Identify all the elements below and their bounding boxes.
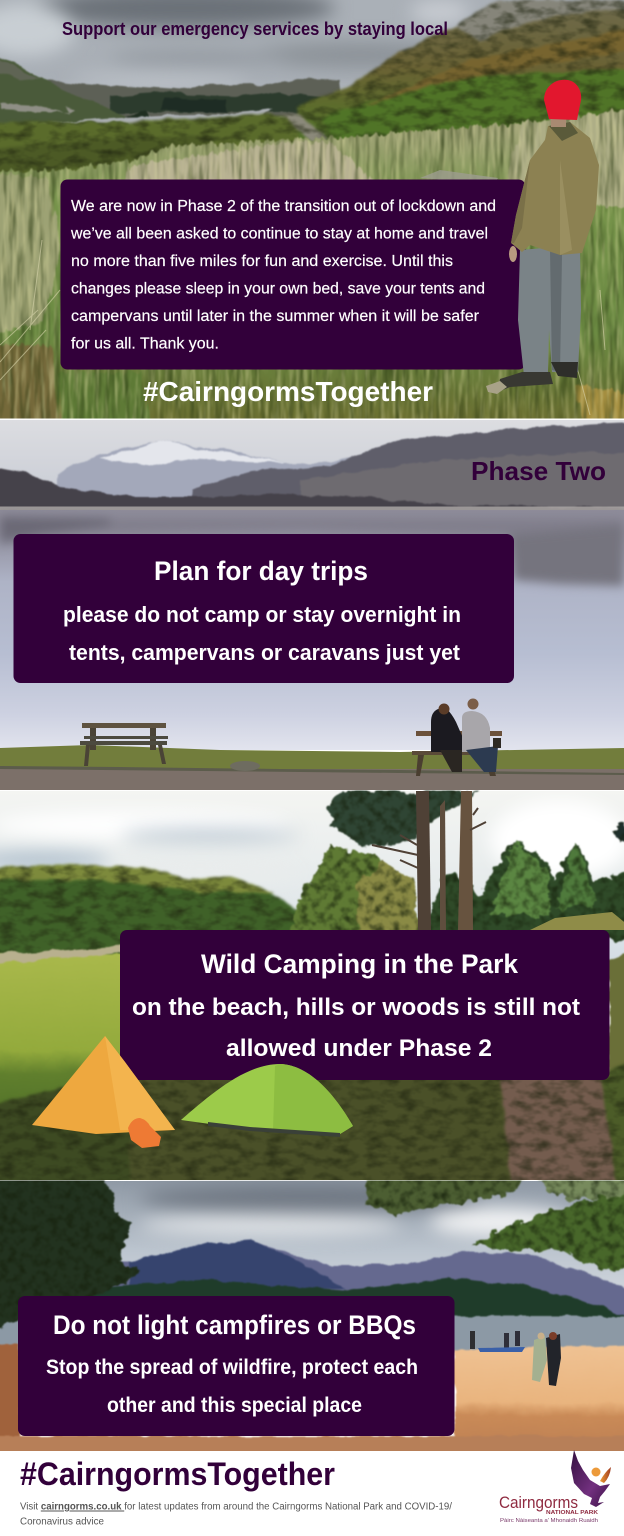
panel: campfires and BBQs	[0, 1175, 624, 1460]
text box: phase 2 message: We are now in Phase 2 of the transition out of lockdown and	[71, 198, 496, 215]
text box: wild camping message: Wild Camping in the Park	[201, 949, 519, 979]
panel: plan for day trips	[0, 420, 624, 790]
text box: campfires message: Stop the spread of wildfire, protect each	[46, 1356, 418, 1379]
logo: cairngorms national park	[499, 1450, 611, 1524]
text box: phase 2 message: for us all. Thank you.	[71, 336, 219, 352]
text: visit cairngorms.co.uk	[20, 1502, 452, 1528]
hashtag: cairngorms together white: #CairngormsTogether	[143, 376, 433, 407]
text box: plan for day trips	[14, 534, 514, 683]
text box: plan for day trips: tents, campervans or caravans just yet	[69, 640, 460, 665]
text box: wild camping message: on the beach, hills or woods is still not	[132, 994, 580, 1021]
icon: sun and flame	[592, 1467, 611, 1483]
text: visit cairngorms.co.uk: Coronavirus advice	[20, 1516, 104, 1528]
text box: phase 2 message: we’ve all been asked to continue to stay at home and travel	[70, 226, 488, 242]
wordmark: gaelic name: Pàirc Nàiseanta a’ Mhonaidh Ruaidh	[500, 1518, 598, 1524]
panel: wild camping	[0, 791, 624, 1190]
text box: campfires message: Do not light campfires or BBQs	[53, 1310, 416, 1340]
text box: campfires message: other and this special place	[107, 1394, 362, 1417]
text: visit cairngorms.co.uk: Visit cairngorms.co.uk for latest updates from around the Cairngorms National Park and COVID-19/	[20, 1502, 452, 1512]
text box: wild camping message	[120, 930, 610, 1080]
figure: couple at picnic bench	[412, 698, 502, 776]
text box: plan for day trips: please do not camp or stay overnight in	[63, 602, 461, 627]
background: pine forest and hills photo	[0, 791, 624, 1190]
background: loch with picnic benches	[0, 420, 624, 790]
icon: orange tent	[32, 1036, 175, 1148]
wordmark: cairngorms: Cairngorms	[499, 1493, 578, 1512]
wordmark: national park: NATIONAL PARK	[546, 1510, 598, 1516]
text box: campfires message	[18, 1296, 454, 1436]
background: highland glen photo	[0, 0, 624, 430]
heading: support our emergency services: Support our emergency services by staying local	[62, 19, 448, 39]
text box: wild camping message: allowed under Phase 2	[226, 1035, 492, 1062]
hashtag: cairngorms together purple: #CairngormsTogether	[20, 1456, 335, 1492]
text box: phase 2 message	[60, 180, 526, 370]
text box: plan for day trips: Plan for day trips	[154, 556, 368, 586]
text box: phase 2 message: campervans until later in the summer when it will be safer	[71, 308, 479, 325]
text box: phase 2 message: changes please sleep in your own bed, save your tents and	[71, 280, 485, 298]
figures: people on the beach	[470, 1331, 561, 1386]
icon: empty picnic bench	[80, 723, 168, 766]
icon: green tent	[181, 1064, 353, 1137]
footer	[0, 1450, 624, 1536]
figure: walker in red hat	[486, 80, 599, 394]
icon: eagle	[571, 1450, 610, 1507]
label: phase two: Phase Two	[471, 456, 606, 486]
text box: phase 2 message: no more than five miles for fun and exercise. Until this	[71, 253, 453, 270]
background: beach and loch photo	[0, 1175, 624, 1460]
panel: stay local hero	[0, 0, 624, 430]
